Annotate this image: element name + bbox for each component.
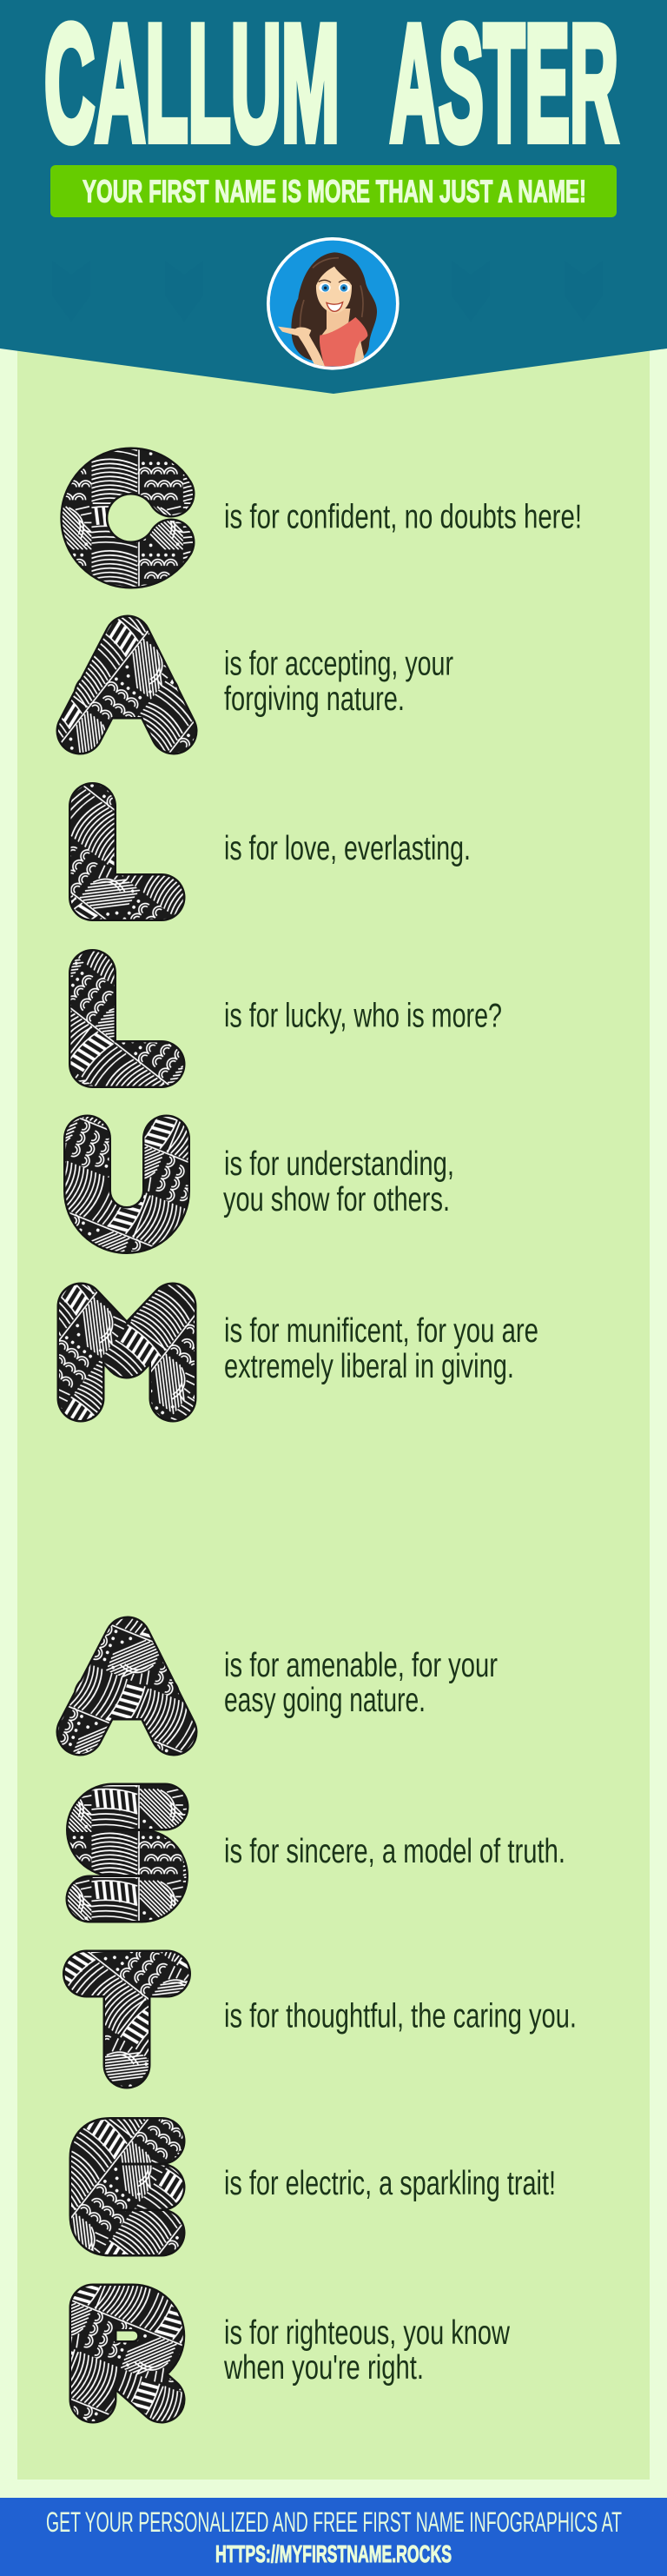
text L second: is for lucky, who is more? (224, 998, 502, 1034)
eyes (319, 283, 331, 292)
row: A second (80, 1640, 498, 1732)
letter A second (80, 1640, 174, 1732)
text A second: easy going nature. (224, 1682, 426, 1719)
text A (224, 645, 453, 718)
text M (224, 1312, 538, 1385)
text S: is for sincere, a model of truth. (224, 1833, 565, 1870)
row: S (89, 1807, 565, 1899)
text U: you show for others. (223, 1181, 450, 1218)
text A second (224, 1647, 498, 1719)
text A: forgiving nature. (224, 681, 405, 718)
row: R (93, 2307, 511, 2400)
row: A (80, 639, 453, 731)
text U: is for understanding, (224, 1145, 454, 1183)
letter S (89, 1807, 165, 1899)
letter A (80, 639, 174, 731)
mouth (327, 302, 343, 311)
text U (223, 1145, 454, 1218)
row: L second (92, 973, 502, 1064)
footer url: HTTPS://MYFIRSTNAME.ROCKS (215, 2540, 452, 2567)
neck (321, 309, 351, 335)
text R: is for righteous, you know (224, 2314, 511, 2352)
header texture (52, 261, 603, 322)
text M: is for munificent, for you are (224, 1312, 538, 1350)
text A: is for accepting, your (224, 645, 453, 683)
row: M (81, 1306, 538, 1398)
row: T (87, 1974, 577, 2065)
text A second: is for amenable, for your (224, 1647, 498, 1684)
row: L (92, 807, 471, 897)
letter T (87, 1974, 167, 2065)
footer band (0, 2498, 667, 2576)
text R (223, 2314, 511, 2387)
subtitle banner (50, 165, 617, 217)
panel: letter list (17, 348, 650, 2480)
red shirt (320, 317, 367, 367)
header band (0, 0, 667, 394)
letter R (93, 2307, 162, 2400)
row: C (84, 471, 582, 565)
row: E (93, 2141, 556, 2233)
letter M (81, 1306, 173, 1398)
row: U (87, 1139, 454, 1231)
text R: when you're right. (223, 2349, 424, 2387)
hair (291, 252, 377, 361)
text L: is for love, everlasting. (224, 830, 471, 867)
text E: is for electric, a sparkling trait! (224, 2165, 556, 2202)
letter U (87, 1139, 167, 1231)
text M: extremely liberal in giving. (224, 1348, 514, 1385)
avatar: smiling woman in blue circle (267, 237, 400, 370)
face (316, 267, 352, 314)
letter E (93, 2141, 162, 2233)
letter C (84, 471, 171, 565)
letter L (92, 807, 162, 897)
letter L second (92, 973, 162, 1064)
arm and hand (278, 327, 325, 367)
